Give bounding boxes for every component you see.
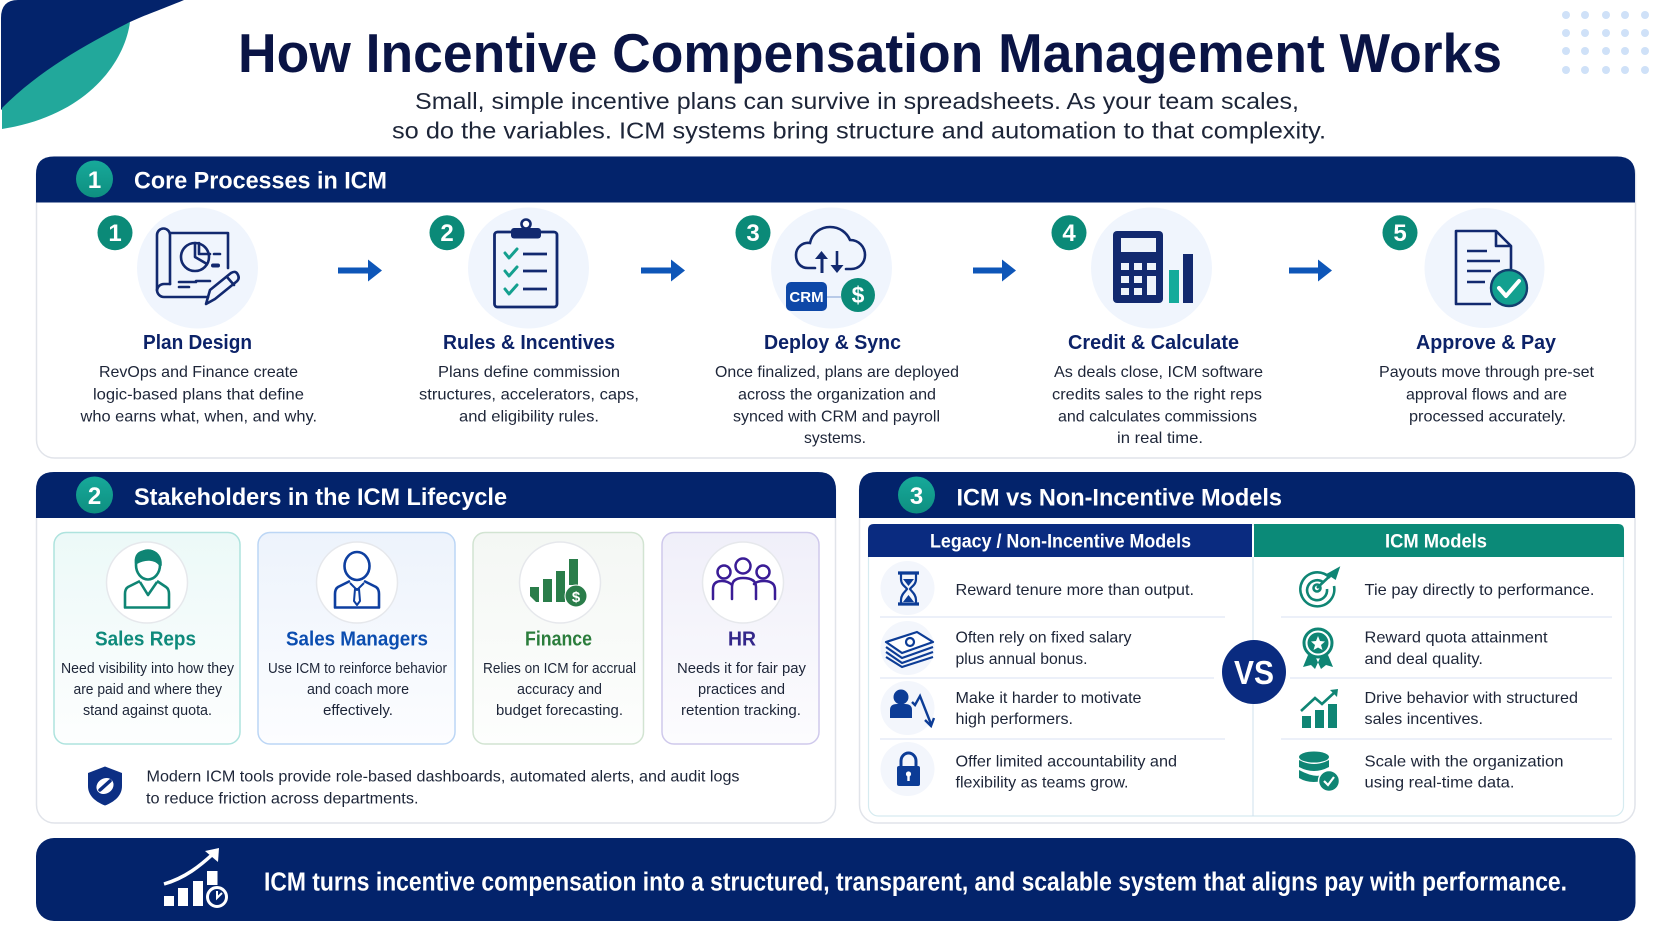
column header: ICM [1254,524,1624,557]
bottom banner [36,838,1636,921]
section header: comparison: ICM vs Non-Incentive Models [956,484,1282,512]
panel: stakeholders [36,472,836,823]
step description [1052,364,1263,447]
role description: Needs it for fair pay [677,660,806,677]
note text: to reduce friction across departments. [146,790,418,808]
icon: finance chart [530,559,587,607]
section header: comparison [859,472,1635,518]
row text: Offer limited accountability and [956,754,1177,770]
step description [419,364,639,426]
role description: stand against quota. [83,702,212,719]
step title: Rules & Incentives [443,332,615,354]
step description: across the organization and [738,386,936,404]
icon: sales rep [125,550,169,608]
step title: Approve & Pay [1416,332,1557,354]
row text: high performers. [956,711,1073,728]
icon: database check [1299,752,1340,792]
row text: flexibility as teams grow. [956,774,1128,792]
row text: plus annual bonus. [956,651,1088,668]
role description: are paid and where they [74,681,222,698]
row: legacy tenure: Reward tenure more than output. [956,582,1194,599]
row: ICM quota [1303,629,1548,669]
row: ICM performance [1300,569,1594,606]
role description: and coach more [307,681,409,698]
step 4: credit and calculate [1052,208,1263,447]
arrow 3 [973,260,1016,282]
role description: Use ICM to reinforce behavior [268,660,447,677]
panel: ICM vs non-incentive models [859,472,1635,823]
row: legacy fixed salary [880,621,1132,675]
row text: using real-time data. [1364,774,1514,792]
row text [1364,690,1578,728]
step title: Plan Design [143,332,252,354]
column header: ICM: ICM Models [1385,532,1487,552]
role name: Sales Managers [286,628,428,650]
card: sales managers [258,532,455,744]
row text [956,630,1132,668]
row: ICM behavior [1301,689,1578,728]
role description: Relies on ICM for accrual [483,660,636,677]
step 2: rules and incentives [419,208,639,426]
icon: calculator with bars [1113,231,1193,303]
row: legacy tenure [880,561,1194,615]
row: legacy motivation [880,681,1142,735]
step description: Payouts move through pre-set [1379,364,1595,381]
step description: Plans define commission [438,364,620,381]
row text: Often rely on fixed salary [956,630,1132,646]
role description [268,660,447,719]
step 1: plan design: 1 [108,220,122,247]
icon: person with falling line [890,690,934,726]
role description: practices and [698,681,785,698]
role description [677,660,806,719]
step 5: approve and pay [1379,208,1595,426]
icon: target [1300,569,1338,606]
subtitle: Small, simple incentive plans can survive in spreadsheets. As your team scales, [415,88,1299,114]
icon: shield [88,766,122,806]
icon: hourglass [898,573,919,604]
VS badge [1222,640,1286,704]
column header: legacy: Legacy / Non-Incentive Models [930,532,1191,552]
step 5: approve and pay: 5 [1393,220,1407,247]
role name: Sales Reps [95,628,196,650]
row text: Reward quota attainment [1364,630,1548,646]
step description: logic-based plans that define [93,386,304,404]
card: HR [662,532,819,744]
row text [956,690,1142,728]
step 4: credit and calculate: 4 [1062,220,1076,247]
role description: Need visibility into how they [61,660,234,677]
row: ICM performance: Tie pay directly to performance. [1364,582,1594,599]
step description: As deals close, ICM software [1054,364,1263,381]
step description: in real time. [1117,430,1203,447]
card: sales reps [54,532,240,744]
icon: clipboard checklist [494,220,557,307]
section header: core processes: Core Processes in ICM [134,168,387,194]
decorative dot grid [1562,11,1649,74]
step description: synced with CRM and payroll [733,408,940,426]
step 1: plan design [79,208,317,426]
note text [146,768,740,808]
role description: effectively. [323,702,393,719]
step description: processed accurately. [1409,408,1566,426]
section header: core processes: 1 [88,167,101,194]
step title: Deploy & Sync [764,332,901,354]
step 3: deploy and sync [715,208,959,447]
role description [61,660,234,719]
card: finance [473,532,644,744]
step description [1379,364,1595,426]
role name: Finance [525,628,592,650]
row text: Drive behavior with structured [1364,690,1578,707]
icon: cloud sync with CRM and dollar [786,227,875,312]
icon: growth chart with clock [164,848,226,906]
icon: finance chart: $ [572,589,581,606]
icon: HR people group [713,558,775,599]
arrow 4 [1289,260,1332,282]
role description: accuracy and [517,681,602,698]
row text: Scale with the organization [1364,754,1564,770]
section header: stakeholders [36,472,836,518]
row text [1364,630,1548,668]
step 2: rules and incentives: 2 [440,220,454,247]
role description: budget forecasting. [496,702,623,719]
row text: and deal quality. [1364,651,1483,668]
icon: award ribbon [1303,629,1333,669]
row text: sales incentives. [1364,711,1483,728]
step description: and eligibility rules. [459,408,599,426]
step description [715,364,959,447]
icon: stack of cash [886,632,933,667]
subtitle: so do the variables. ICM systems bring structure and automation to that complexity. [392,118,1326,144]
column header: legacy [868,524,1252,557]
role description [483,660,636,719]
row text [956,754,1177,792]
step title: Credit & Calculate [1068,332,1239,354]
row: legacy accountability [880,742,1177,796]
icon: lock [897,753,920,786]
icon: plan document with pencil [157,228,239,304]
step description: structures, accelerators, caps, [419,386,639,404]
icon: sales manager [335,552,379,608]
step description: who earns what, when, and why. [79,408,317,426]
arrow 2 [641,260,685,282]
subtitle [392,88,1326,144]
section header: comparison: 3 [910,483,923,510]
icon: cloud sync with CRM and dollar: CRM [789,289,824,306]
step description: systems. [804,430,866,447]
icon: document with check [1456,231,1527,306]
comparison table frame [868,525,1624,816]
icon: growth chart [1301,689,1338,728]
decorative corner swoosh [1,0,184,129]
role description: retention tracking. [681,702,801,719]
row: ICM scale [1299,752,1564,792]
section header: stakeholders: Stakeholders in the ICM Lifecycle [134,484,507,511]
arrow 1 [338,260,382,282]
step description: credits sales to the right reps [1052,386,1262,404]
role name: HR [728,628,757,650]
icon: cloud sync with CRM and dollar: $ [852,282,865,308]
step description: approval flows and are [1406,386,1567,404]
row text [1364,754,1564,792]
step description: Once finalized, plans are deployed [715,364,959,381]
note text: Modern ICM tools provide role-based dashboards, automated alerts, and audit logs [146,768,740,786]
title: How Incentive Compensation Management Works [238,22,1502,84]
row text: Make it harder to motivate [956,690,1142,707]
step 3: deploy and sync: 3 [746,220,760,247]
VS badge: VS [1234,654,1274,691]
section header: core processes [36,156,1635,202]
section header: stakeholders: 2 [88,483,101,510]
step description: RevOps and Finance create [99,364,298,381]
panel: core processes [36,156,1636,458]
step description [79,364,317,426]
step description: and calculates commissions [1058,408,1257,426]
